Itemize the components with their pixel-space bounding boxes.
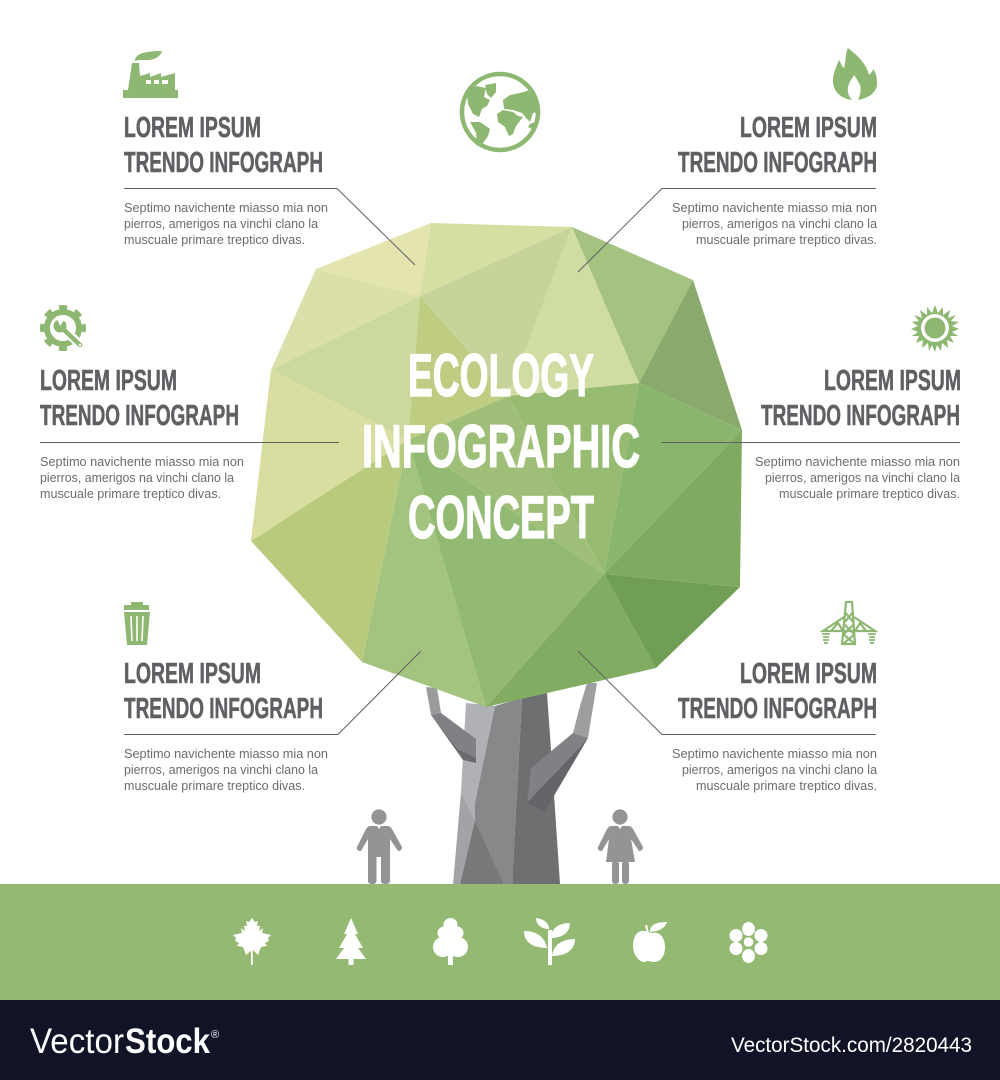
icon: pine tree — [336, 918, 366, 965]
ground band — [0, 884, 1000, 1000]
icon: factory — [123, 51, 178, 98]
icon: power pylon — [822, 602, 876, 644]
text block: bottom right: LOREM IPSUM — [740, 658, 877, 690]
icon: sun — [911, 305, 959, 352]
text block: top right: LOREM IPSUM — [740, 112, 877, 144]
text block: middle left: muscuale primare treptico divas. — [40, 487, 221, 501]
text block: bottom right: muscuale primare treptico divas. — [696, 779, 877, 793]
title: ECOLOGY — [408, 342, 594, 409]
icon: round tree — [433, 918, 468, 965]
icon: sprout — [524, 918, 575, 965]
text block: middle right: pierros, amerigos na vinchi clano la — [765, 471, 960, 485]
text block: top right: pierros, amerigos na vinchi clano la — [682, 217, 877, 231]
text block: bottom right: Septimo navichente miasso mia non — [672, 747, 877, 761]
icon: trash can — [124, 602, 150, 645]
text block: middle right — [661, 365, 961, 501]
text block: top left: Septimo navichente miasso mia non — [124, 201, 328, 215]
text block: bottom right: TRENDO INFOGRAPH — [678, 693, 877, 725]
text block: top right — [578, 112, 877, 272]
icon: maple leaf — [233, 918, 271, 965]
text block: middle left: pierros, amerigos na vinchi clano la — [40, 471, 234, 485]
text block: middle left — [40, 365, 339, 501]
footer bar: Stock — [125, 1022, 210, 1061]
text block: middle left: TRENDO INFOGRAPH — [40, 400, 239, 432]
icon: flame — [833, 48, 877, 100]
footer bar: ® — [211, 1029, 219, 1041]
person: man — [357, 809, 402, 884]
text block: top left: LOREM IPSUM — [124, 112, 261, 144]
text block: top right: Septimo navichente miasso mia non — [672, 201, 877, 215]
text block: bottom right: pierros, amerigos na vinchi clano la — [682, 763, 877, 777]
text block: top left: muscuale primare treptico divas. — [124, 233, 305, 247]
footer bar: VectorStock.com/2820443 — [731, 1034, 972, 1057]
footer bar: Vector — [30, 1022, 124, 1061]
text block: top right: muscuale primare treptico divas. — [696, 233, 877, 247]
text block: top left: pierros, amerigos na vinchi clano la — [124, 217, 318, 231]
text block: middle left: LOREM IPSUM — [40, 365, 177, 397]
text block: middle left: Septimo navichente miasso mia non — [40, 455, 244, 469]
icon: globe — [462, 74, 538, 150]
tree crown: low-poly facets — [251, 223, 742, 707]
text block: middle right: muscuale primare treptico divas. — [779, 487, 960, 501]
tree trunk and branches — [426, 683, 597, 884]
icon: flower — [730, 922, 768, 963]
text block: top left: TRENDO INFOGRAPH — [124, 147, 323, 179]
title: CONCEPT — [408, 484, 594, 551]
text block: bottom left: pierros, amerigos na vinchi clano la — [124, 763, 318, 777]
title: INFOGRAPHIC — [362, 413, 640, 480]
text block: bottom left: TRENDO INFOGRAPH — [124, 693, 323, 725]
person: woman — [598, 809, 643, 884]
text block: bottom right — [578, 651, 877, 793]
footer bar — [0, 1000, 1000, 1080]
text block: bottom left: muscuale primare treptico divas. — [124, 779, 305, 793]
title — [362, 342, 640, 551]
text block: top left — [124, 112, 415, 265]
text block: bottom left: LOREM IPSUM — [124, 658, 261, 690]
text block: bottom left — [124, 651, 421, 793]
text block: bottom left: Septimo navichente miasso mia non — [124, 747, 328, 761]
text block: middle right: Septimo navichente miasso mia non — [755, 455, 960, 469]
icon: apple — [633, 922, 667, 962]
icon: gear and wrench — [43, 308, 86, 351]
text block: top right: TRENDO INFOGRAPH — [678, 147, 877, 179]
